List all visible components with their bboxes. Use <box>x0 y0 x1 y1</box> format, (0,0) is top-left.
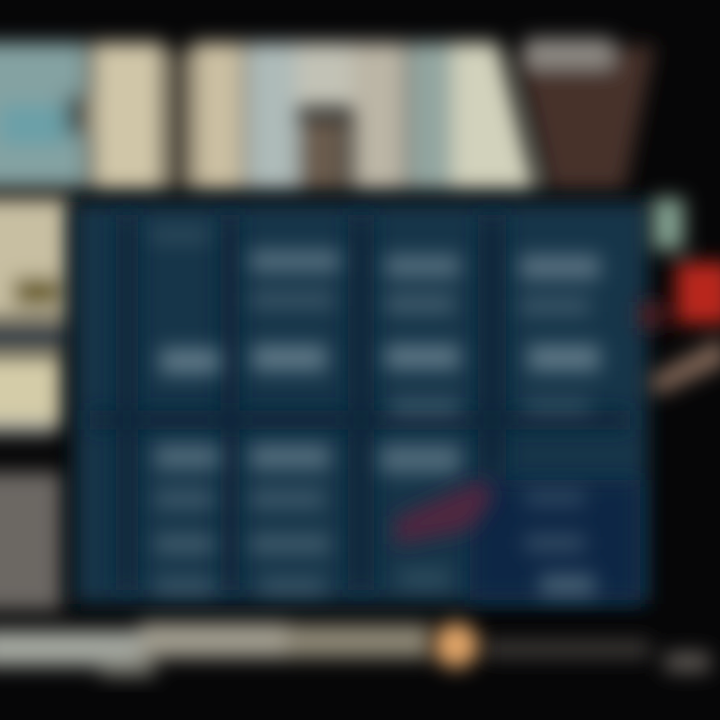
table dark column dividers <box>90 215 640 600</box>
bottom strip <box>0 622 710 676</box>
right side accents <box>640 198 720 396</box>
navy table panel <box>74 202 648 604</box>
table text blocks <box>150 228 600 595</box>
top photo band <box>0 38 655 190</box>
icon: orange badge <box>433 622 479 668</box>
magenta highlight <box>395 480 495 545</box>
left column photo strip <box>0 198 68 610</box>
